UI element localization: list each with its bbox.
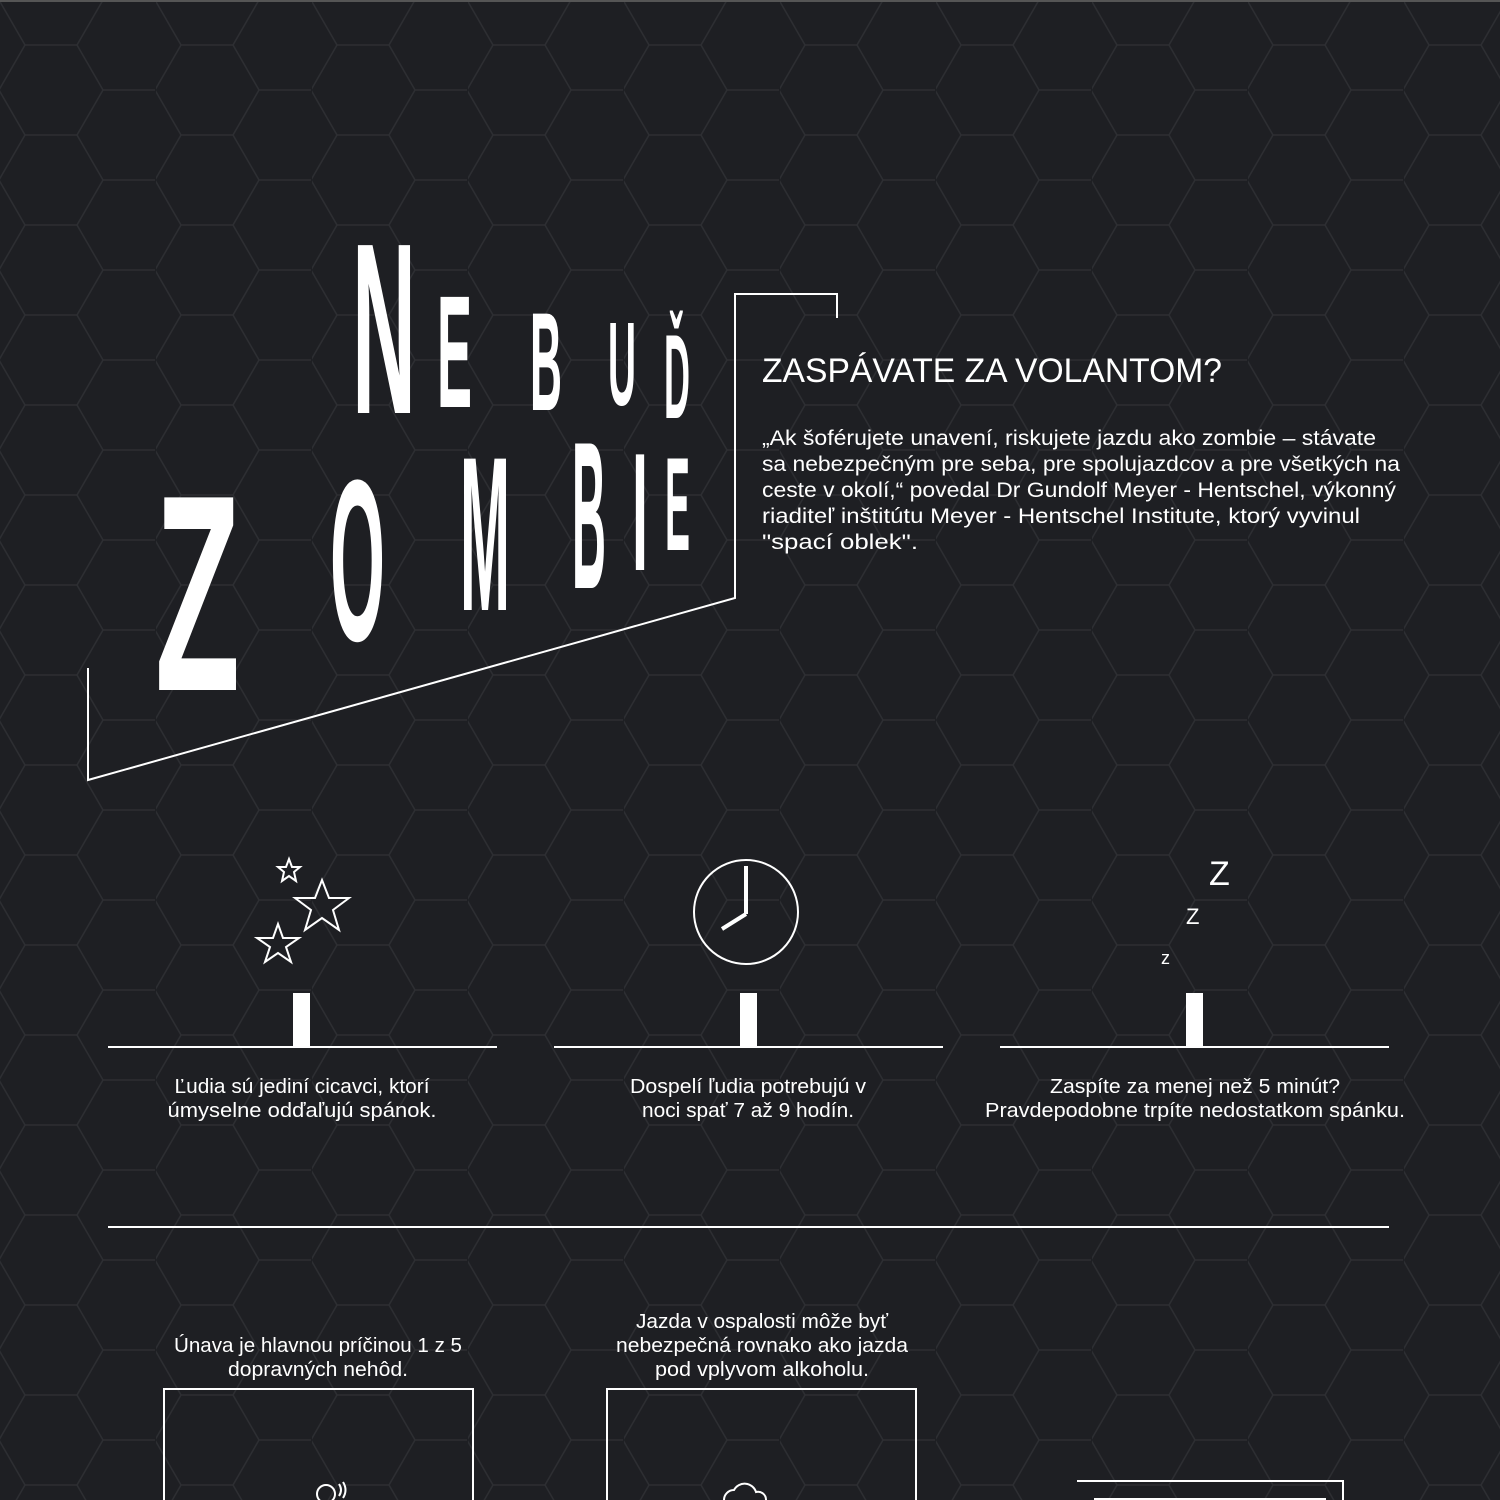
box with cloud icon	[607, 1389, 916, 1500]
text: clock fact: Dospelí ľudia potrebujú v	[630, 1076, 866, 1098]
quote text	[762, 427, 1400, 554]
text: E	[665, 429, 690, 578]
text: zzz fact	[985, 1076, 1405, 1122]
panel: clock fact	[554, 860, 943, 1122]
text: fatigue	[174, 1334, 462, 1381]
text: fatigue: dopravných nehôd.	[228, 1359, 408, 1381]
heading: ZASPÁVATE ZA VOLANTOM?: ZASPÁVATE ZA VOLANTOM?	[762, 352, 1222, 390]
icon: zzz	[1161, 855, 1230, 968]
icon: zzz: Z	[1186, 904, 1199, 929]
quote text: „Ak šoférujete unavení, riskujete jazdu ako zombie – stávate	[762, 427, 1376, 450]
title: NEBUĎ ZOMBIE: Z	[155, 437, 240, 750]
quote text: riaditeľ inštitútu Meyer - Hentschel Institute, ktorý vyvinul	[762, 505, 1360, 528]
panel: stars fact	[108, 859, 497, 1122]
text: clock fact	[630, 1076, 866, 1122]
text: clock fact: noci spať 7 až 9 hodín.	[642, 1100, 854, 1122]
quote text: ceste v okolí,“ povedal Dr Gundolf Meyer - Hentschel, výkonný	[762, 479, 1397, 502]
title: NEBUĎ ZOMBIE: N	[352, 192, 416, 465]
panel: third box (partial)	[1077, 1481, 1343, 1500]
icon: stars	[257, 859, 349, 962]
icon: zzz: z	[1161, 948, 1170, 968]
title: NEBUĎ ZOMBIE: I	[632, 419, 648, 606]
quote text: sa nebezpečným pre seba, pre spolujazdcov a pre všetkých na	[762, 453, 1400, 476]
text: stars fact: úmyselne odďaľujú spánok.	[168, 1100, 436, 1122]
text: alcohol: Jazda v ospalosti môže byť	[636, 1311, 889, 1333]
text: zzz fact: Pravdepodobne trpíte nedostatkom spánku.	[985, 1100, 1405, 1122]
title: NEBUĎ ZOMBIE: B	[572, 398, 606, 633]
title: NEBUĎ ZOMBIE: E	[437, 263, 472, 442]
icon: clock	[694, 860, 798, 964]
title: NEBUĎ ZOMBIE	[155, 192, 690, 750]
text: zzz fact: Zaspíte za menej než 5 minút?	[1050, 1076, 1340, 1098]
text: alcohol	[616, 1311, 909, 1381]
text: Ď	[664, 309, 690, 444]
text: stars fact: Ľudia sú jediní cicavci, ktorí	[174, 1076, 430, 1098]
panel: alcohol comparison	[607, 1311, 916, 1500]
quote text: "spací oblek".	[762, 531, 918, 554]
text: alcohol: pod vplyvom alkoholu.	[655, 1359, 869, 1381]
panel: fatigue accidents	[164, 1334, 473, 1500]
panel: zzz fact	[985, 855, 1405, 1122]
box with icon	[164, 1389, 473, 1500]
text: fatigue: Únava je hlavnou príčinou 1 z 5	[174, 1334, 462, 1357]
icon: zzz: Z	[1209, 855, 1230, 893]
text: stars fact	[168, 1076, 436, 1122]
title: NEBUĎ ZOMBIE: M	[460, 412, 510, 658]
text: alcohol: nebezpečná rovnako ako jazda	[616, 1335, 909, 1357]
title: NEBUĎ ZOMBIE: U	[608, 299, 636, 431]
frame around title	[88, 294, 837, 780]
title: NEBUĎ ZOMBIE: O	[330, 431, 385, 689]
title: NEBUĎ ZOMBIE: B	[530, 283, 562, 440]
